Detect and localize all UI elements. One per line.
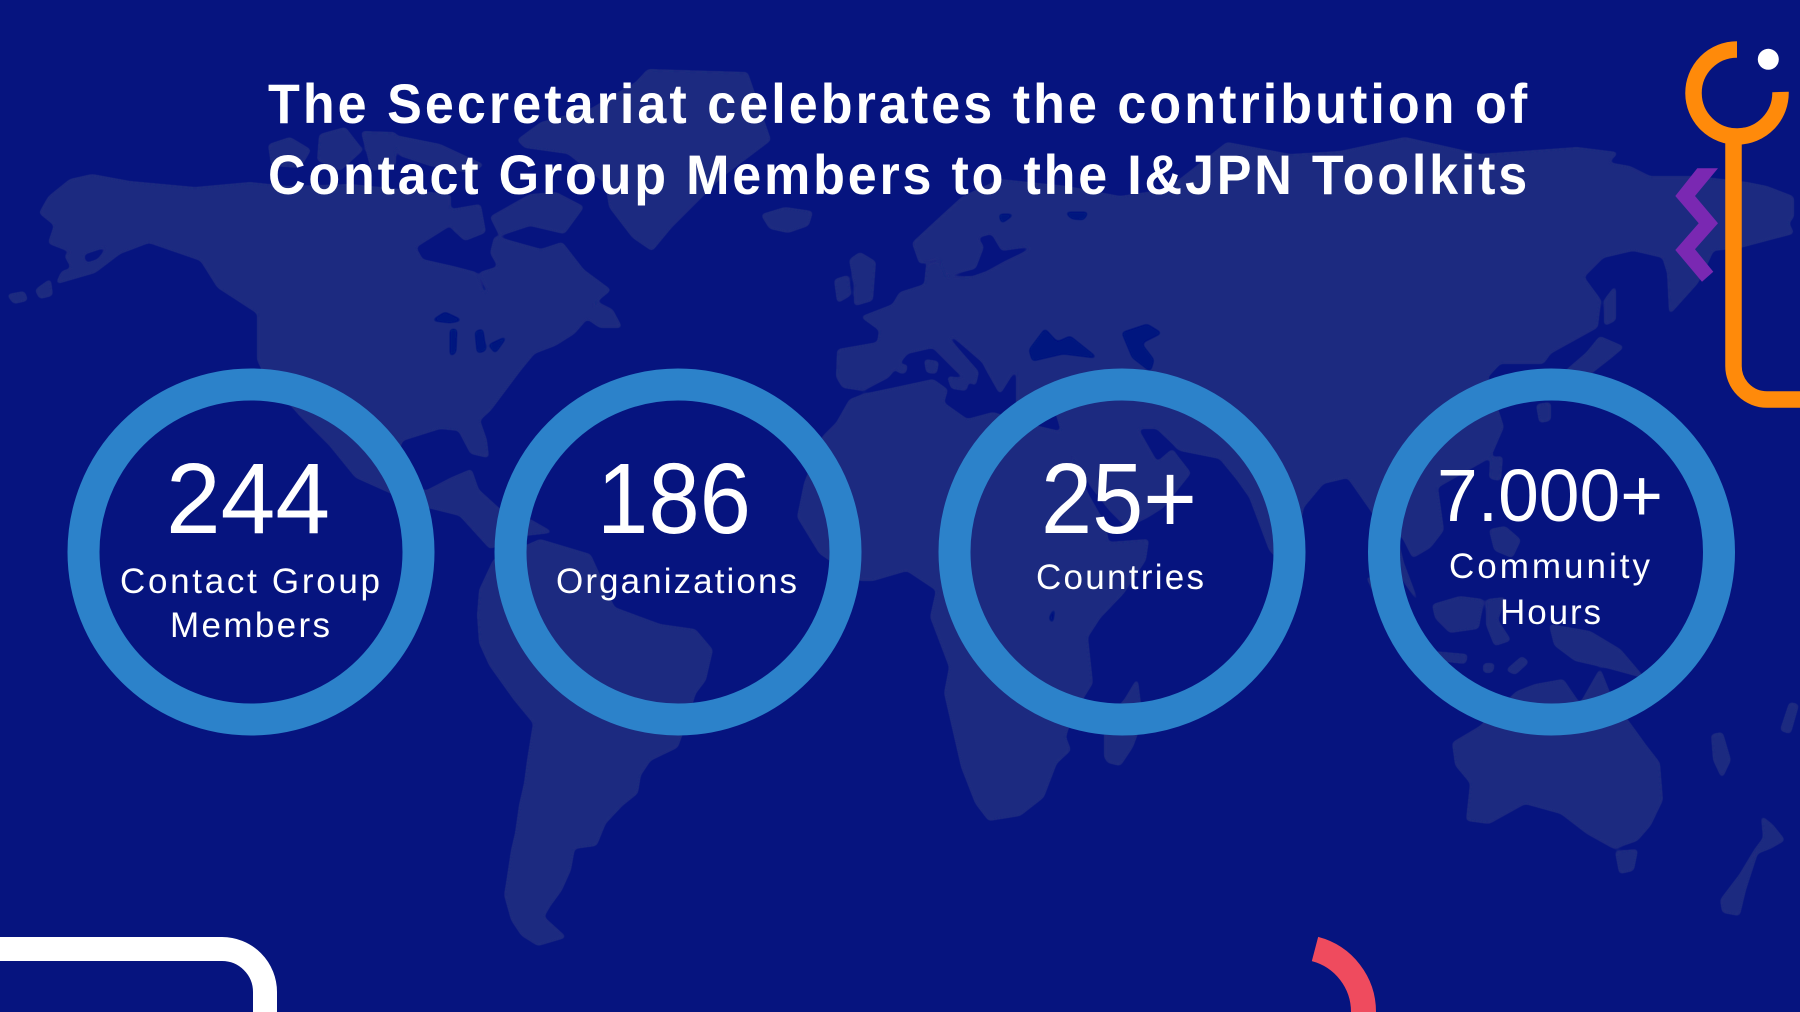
title: Contact Group Members to the I&JPN Toolkits [268,144,1527,206]
stat: organizations: 186 [597,443,751,555]
stat: community hours: 7.000+ [1437,454,1663,537]
stat: organizations: Organizations [556,562,797,601]
stat: countries: 25+ [1041,443,1197,555]
stat: contact group members [84,384,418,720]
stat: community hours: Hours [1500,593,1601,632]
stat: contact group members: Members [170,606,330,645]
title: The Secretariat celebrates the contribution of [268,73,1528,135]
stat: contact group members: Contact Group [120,562,380,601]
decoration: white rounded line bottom left [0,949,265,1012]
decoration: red arc bottom centre [1315,949,1364,1012]
title [268,73,1528,206]
icon: orange hook and stem [1694,50,1800,400]
stat: community hours: Community [1449,547,1650,586]
stat: countries: Countries [1036,558,1204,597]
stat: community hours [1384,384,1719,720]
icon: white dot [1758,49,1779,70]
stat: organizations [510,384,846,720]
stat: countries [954,384,1290,720]
icon: purple zigzag [1675,168,1718,282]
stat: contact group members: 244 [166,443,330,555]
